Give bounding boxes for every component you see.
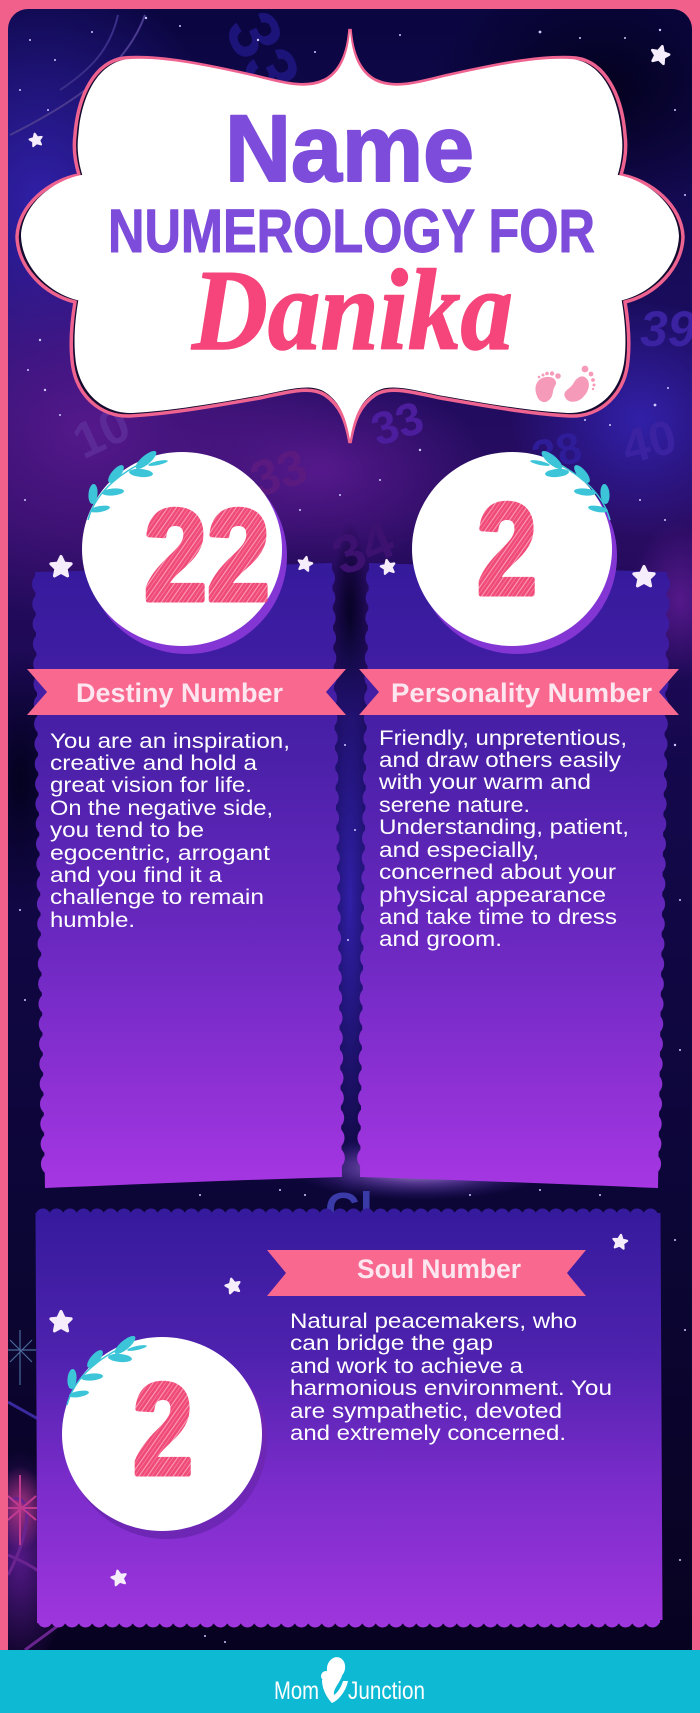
faint numbers: 33 xyxy=(244,438,314,508)
text: destiny description: On the negative side, xyxy=(50,797,273,820)
faint numbers: 33 xyxy=(209,0,316,106)
circle: destiny number 22: 22 xyxy=(144,482,270,628)
text: destiny description xyxy=(50,730,290,932)
text: soul description: Natural peacemakers, who xyxy=(290,1310,577,1333)
ribbon: personality number: Personality Number xyxy=(391,678,653,708)
ribbon: destiny number xyxy=(27,669,346,715)
faint numbers: 34 xyxy=(324,509,402,587)
panel: soul number xyxy=(37,1213,661,1623)
title plaque xyxy=(17,29,683,443)
text: destiny description: great vision for life. xyxy=(50,774,252,797)
text: soul description: can bridge the gap xyxy=(290,1332,493,1355)
circle: soul number 2 xyxy=(62,1333,267,1539)
text: personality description: physical appearance xyxy=(379,884,606,907)
footer band xyxy=(0,1650,700,1713)
text: soul description: harmonious environment. You xyxy=(290,1377,612,1400)
text: personality description: with your warm and xyxy=(378,771,591,794)
title: Danika: Danika xyxy=(191,247,513,375)
text: destiny description: humble. xyxy=(50,909,135,932)
circle: personality number 2: 2 xyxy=(477,476,537,622)
text: soul description: are sympathetic, devoted xyxy=(290,1400,562,1423)
ribbon: soul number xyxy=(267,1250,586,1296)
text: personality description: concerned about your xyxy=(379,861,616,884)
text: destiny description: creative and hold a xyxy=(50,752,257,775)
faint numbers xyxy=(64,0,696,1237)
text: personality description: serene nature. xyxy=(379,794,530,817)
footer logo: MomJunction: Junction xyxy=(348,1677,425,1705)
text: personality description: Friendly, unpretentious, xyxy=(379,727,627,750)
footer logo: MomJunction: Mom xyxy=(274,1677,319,1705)
circle: soul number 2: 2 xyxy=(133,1356,193,1502)
text: personality description xyxy=(378,727,629,951)
faint numbers: 33 xyxy=(365,391,430,456)
icon: baby feet xyxy=(535,366,596,402)
faint numbers: Cl xyxy=(325,1184,373,1237)
faint arcs and bursts xyxy=(8,15,145,1650)
panel: destiny number xyxy=(35,563,342,1188)
title: Name: Name xyxy=(225,96,474,202)
text: soul description: and work to achieve a xyxy=(290,1355,523,1378)
text: destiny description: egocentric, arrogant xyxy=(50,842,270,865)
circle: destiny number 22 xyxy=(82,448,287,654)
text: personality description: and especially, xyxy=(379,839,539,862)
text: soul description xyxy=(290,1310,612,1445)
ribbon: soul number: Soul Number xyxy=(357,1254,521,1284)
text: destiny description: challenge to remain xyxy=(50,886,264,909)
text: destiny description: and you find it a xyxy=(50,864,222,887)
panel: personality number xyxy=(360,563,667,1188)
text: destiny description: You are an inspiration, xyxy=(50,730,290,753)
text: soul description: and extremely concerned. xyxy=(290,1422,566,1445)
faint numbers: 40 xyxy=(617,411,682,475)
footer logo: MomJunction xyxy=(274,1655,425,1705)
text: personality description: and take time to dress xyxy=(379,906,617,929)
title: Numerology for: NUMEROLOGY FOR xyxy=(108,197,595,265)
faint numbers: 38 xyxy=(527,423,587,482)
text: personality description: and groom. xyxy=(379,928,502,951)
text: personality description: Understanding, patient, xyxy=(379,816,629,839)
text: personality description: and draw others easily xyxy=(379,749,622,772)
ribbon: personality number xyxy=(359,669,679,715)
text: destiny description: you tend to be xyxy=(50,819,204,842)
circle: personality number 2 xyxy=(412,448,617,654)
ribbon: destiny number: Destiny Number xyxy=(76,678,283,708)
faint numbers: 10 xyxy=(64,395,139,470)
faint numbers: 39 xyxy=(640,301,696,357)
